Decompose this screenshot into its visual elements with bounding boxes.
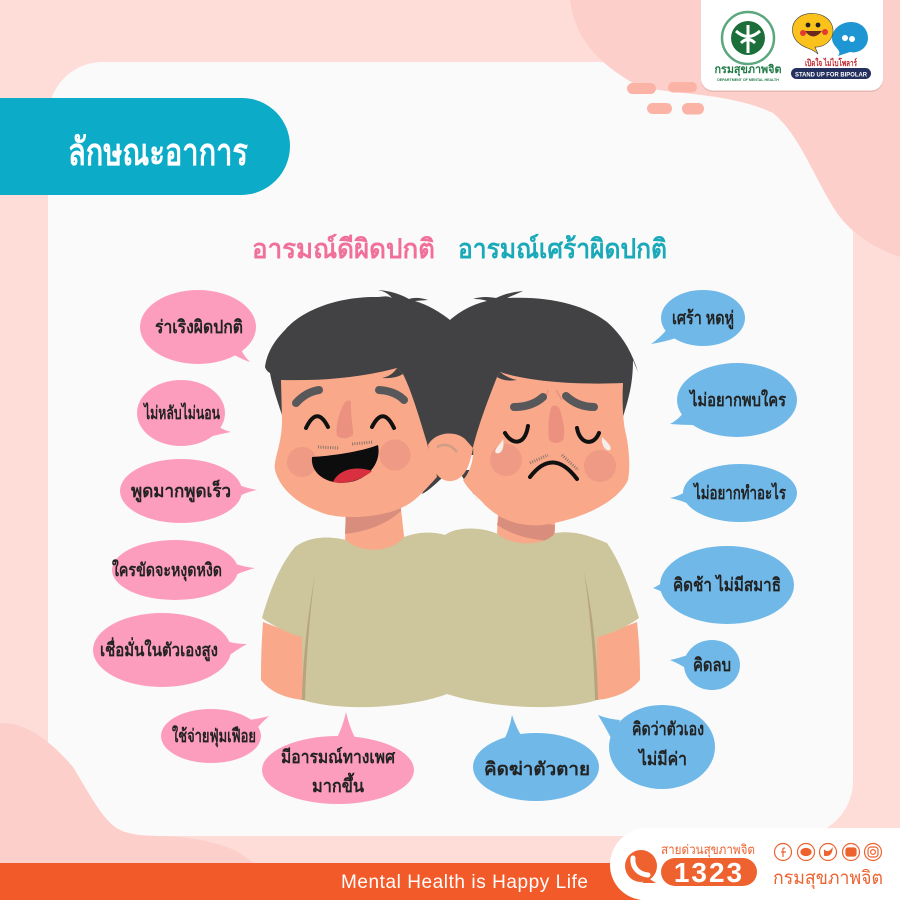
bubbles: pink symptoms xyxy=(93,290,414,804)
logo card xyxy=(701,0,883,92)
bubble: negative thinking xyxy=(670,640,740,690)
bubble: no sleep xyxy=(137,380,231,446)
hair below ear right xyxy=(458,470,478,501)
bubble: fast speech xyxy=(120,459,257,523)
bubble: overspending: ใช้จ่ายฟุ่มเฟือย xyxy=(172,725,256,748)
bubble: high confidence xyxy=(93,613,247,687)
eyebrows xyxy=(514,397,543,407)
bubble: overspending xyxy=(161,709,269,763)
bubble: suicidal thoughts xyxy=(473,715,599,801)
right neck xyxy=(497,510,555,545)
shirt fold right xyxy=(584,572,598,700)
bubble: avoid people: ไม่อยากพบใคร xyxy=(688,389,786,410)
bubble: avoid people xyxy=(670,363,797,437)
eyes xyxy=(505,426,528,442)
bubble: no sleep: ไม่หลับไม่นอน xyxy=(143,402,220,423)
forehead crease xyxy=(545,390,562,400)
right face xyxy=(463,372,629,525)
bubble: feeling worthless xyxy=(598,705,715,789)
social icons xyxy=(774,844,882,860)
bubble: sad, depressed xyxy=(651,290,745,346)
mouth xyxy=(530,462,577,479)
bubble: slow thinking: คิดช้า ไม่มีสมาธิ xyxy=(673,574,781,595)
heading: abnormal good mood: อารมณ์ดีผิดปกติ xyxy=(252,233,435,264)
background blob: top right xyxy=(570,0,900,257)
left arm xyxy=(261,622,303,700)
bubble: increased libido: มากขึ้น xyxy=(312,772,365,796)
campaign badge xyxy=(791,68,871,79)
bottom orange bar xyxy=(0,863,640,900)
bubble: increased libido: มีอารมณ์ทางเพศ xyxy=(281,746,395,767)
bubble: slow thinking xyxy=(653,546,794,624)
department name: DEPARTMENT OF MENTAL HEALTH xyxy=(717,78,779,82)
bubble: sad, depressed: เศร้า หดหู่ xyxy=(672,308,734,330)
right arm xyxy=(597,622,640,700)
hair wisp xyxy=(382,368,403,378)
left neck xyxy=(345,500,405,550)
bubble: feeling worthless: คิดว่าตัวเอง xyxy=(632,719,704,739)
bubble: irritable: ใครขัดจะหงุดหงิด xyxy=(112,559,222,582)
heading: abnormal sad mood: อารมณ์เศร้าผิดปกติ xyxy=(458,233,667,264)
department name xyxy=(714,63,782,82)
bubble: increased libido xyxy=(262,712,414,804)
decorative pills xyxy=(627,82,704,114)
bubble: high confidence: เชื่อมั่นในตัวเองสูง xyxy=(100,637,218,662)
department name: กรมสุขภาพจิต xyxy=(714,63,782,77)
campaign tagline: เปิดใจ ไม่ไบโพลาร์ xyxy=(805,57,857,68)
hair wisp xyxy=(497,372,517,381)
hair below ear left xyxy=(422,470,450,494)
bubble: no motivation xyxy=(670,464,797,522)
bubble: feeling worthless: ไม่มีค่า xyxy=(637,748,687,769)
hotline panel xyxy=(610,828,900,900)
department name footer: กรมสุขภาพจิต xyxy=(773,868,883,890)
shirt fold left xyxy=(302,574,315,700)
bubble: no motivation: ไม่อยากทำอะไร xyxy=(693,482,786,503)
bubble: abnormal cheer xyxy=(140,290,256,364)
hair xyxy=(265,290,638,455)
icon: department seal xyxy=(722,12,774,64)
main white panel xyxy=(48,62,853,836)
illustration: two-faced man xyxy=(261,290,640,707)
icon: phone bubble xyxy=(625,850,657,883)
frown lines xyxy=(530,455,578,470)
shirt xyxy=(262,528,639,707)
eyes xyxy=(306,416,328,428)
campaign badge: STAND UP FOR BIPOLAR xyxy=(795,72,867,78)
icon: yellow smiling speech bubble xyxy=(792,13,833,54)
bubble: negative thinking: คิดลบ xyxy=(693,655,731,675)
bubble: fast speech: พูดมากพูดเร็ว xyxy=(131,479,231,503)
bubble: suicidal thoughts: คิดฆ่าตัวตาย xyxy=(484,759,590,779)
nose xyxy=(548,406,564,443)
bubble: abnormal cheer: ร่าเริงผิดปกติ xyxy=(155,317,243,337)
background blob: bottom left xyxy=(0,723,253,863)
bubble: irritable xyxy=(112,540,255,600)
nose xyxy=(337,400,353,438)
smile lines xyxy=(318,442,373,448)
hotline label: สายด่วนสุขภาพจิต xyxy=(661,842,755,858)
tears xyxy=(495,439,504,453)
mouth xyxy=(312,445,379,483)
title: ลักษณะอาการ xyxy=(68,132,248,174)
icon: blue speech bubble xyxy=(832,22,868,56)
left face xyxy=(275,368,437,517)
ear xyxy=(428,433,473,481)
slogan: Mental Health is Happy Life xyxy=(341,872,588,893)
hotline number: 1323 xyxy=(674,857,744,888)
bubbles: blue symptoms xyxy=(473,290,797,801)
eyebrows xyxy=(296,390,319,403)
title tag xyxy=(0,98,290,195)
